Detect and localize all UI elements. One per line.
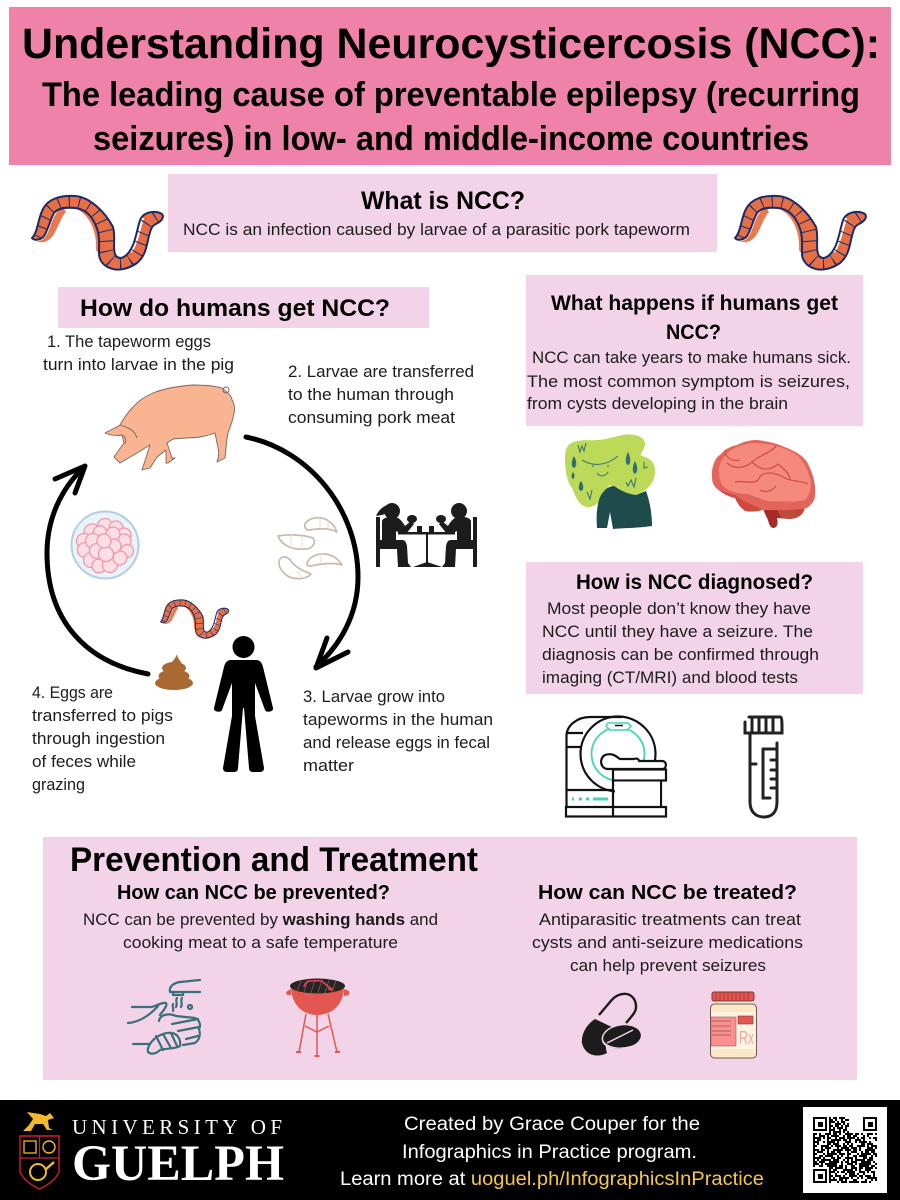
- step 4 text: grazing: [32, 775, 85, 794]
- griffin crest: [23, 1112, 54, 1131]
- symptoms text: NCC can take years to make humans sick.: [532, 348, 851, 367]
- title banner: [9, 7, 891, 165]
- icon: sick person: [565, 434, 655, 529]
- University of Guelph logo: [20, 1112, 284, 1192]
- heading: what happens: What happens if humans get: [551, 292, 838, 315]
- diagnosis text: Most people don’t know they have: [547, 599, 811, 618]
- sub-section: treatment text: can help prevent seizures: [570, 956, 766, 975]
- main title: Understanding Neurocysticercosis (NCC):: [22, 20, 880, 68]
- panel: what is NCC: [168, 174, 717, 252]
- sub-section: prevention text: cooking meat to a safe temperature: [123, 933, 398, 952]
- icon: tapeworm right: [735, 196, 866, 270]
- icon: tapeworm left: [32, 196, 163, 270]
- heading: diagnosed: How is NCC diagnosed?: [576, 571, 813, 594]
- diagnosis text: imaging (CT/MRI) and blood tests: [542, 668, 798, 687]
- icon: larvae: [278, 518, 342, 579]
- subtitle: seizures) in low- and middle-income countries: [93, 120, 809, 158]
- step 1 text: turn into larvae in the pig: [43, 355, 234, 374]
- diagnosis text: NCC until they have a seizure. The: [542, 622, 813, 641]
- step 4 text: through ingestion: [32, 729, 165, 748]
- icon: brain: [712, 440, 815, 528]
- step 4 text: of feces while: [32, 752, 136, 771]
- step 4 text: [32, 683, 173, 794]
- definition text: NCC is an infection caused by larvae of a parasitic pork tapeworm: [183, 220, 690, 239]
- step 2 text: 2. Larvae are transferred: [288, 362, 474, 381]
- step 3 text: matter: [303, 756, 354, 775]
- step 3 text: [303, 687, 493, 775]
- sub-section: prevention text: NCC can be prevented by washing hands and: [83, 910, 438, 929]
- credit text: Created by Grace Couper for the: [404, 1114, 700, 1135]
- symptoms text: from cysts developing in the brain: [527, 394, 788, 413]
- heading: prevention and treatment: Prevention and Treatment: [70, 841, 478, 879]
- icon: prescription bottle: Rx: [739, 1028, 754, 1048]
- icon: blood test tube: [745, 717, 782, 817]
- symptoms text: [527, 348, 851, 413]
- diagnosis text: diagnosis can be confirmed through: [542, 645, 819, 664]
- sub-section: treatment text: cysts and anti-seizure medications: [532, 933, 803, 952]
- sub-section: treatment text: How can NCC be treated?: [538, 882, 797, 904]
- step 4 text: transferred to pigs: [32, 706, 173, 725]
- heading: what is NCC: What is NCC?: [361, 187, 525, 215]
- step 2 text: to the human through: [288, 385, 454, 404]
- sub-section: treatment text: Antiparasitic treatments can treat: [539, 910, 801, 929]
- sub-section: treatment text: [532, 882, 803, 975]
- subtitle: [42, 76, 860, 158]
- step 3 text: and release eggs in fecal: [303, 733, 490, 752]
- diagnosis text: [542, 599, 819, 687]
- panel: how do humans get NCC heading: How do humans get NCC?: [80, 295, 390, 322]
- icon: pig: [105, 385, 235, 470]
- icon: MRI scanner: [566, 716, 666, 817]
- arrow: feces back to pig: [47, 466, 148, 674]
- symptoms text: The most common symptom is seizures,: [527, 372, 850, 391]
- heading: what happens: NCC?: [666, 321, 721, 344]
- step 4 text: 4. Eggs are: [32, 683, 113, 702]
- sub-section: prevention text: [83, 882, 438, 952]
- panel: how is NCC diagnosed: [526, 562, 863, 694]
- panel: prevention and treatment: [43, 837, 857, 1080]
- icon: washing hands: [128, 980, 200, 1054]
- step 2 text: consuming pork meat: [288, 408, 455, 427]
- heading: what happens: [551, 292, 838, 344]
- icon: small tapeworm: [161, 600, 229, 638]
- step 3 text: 3. Larvae grow into: [303, 687, 445, 706]
- step 1 text: 1. The tapeworm eggs: [47, 332, 211, 351]
- icon: feces: [155, 654, 193, 690]
- QR code: [803, 1107, 887, 1193]
- subtitle: The leading cause of preventable epilepsy (recurring: [42, 76, 860, 114]
- credit text: Infographics in Practice program.: [402, 1142, 697, 1163]
- shield: [20, 1136, 59, 1189]
- panel: how do humans get NCC heading: [58, 287, 429, 328]
- icon: people eating at table: [376, 503, 477, 567]
- credit text: Learn more at uoguel.ph/InfographicsInPractice: [340, 1169, 764, 1190]
- credit text: [340, 1114, 764, 1190]
- wordmark: GUELPH: [72, 1136, 284, 1192]
- sub-section: prevention text: How can NCC be prevented?: [117, 882, 390, 904]
- icon: prescription bottle: [710, 992, 756, 1058]
- footer bar: [0, 1100, 900, 1200]
- step 2 text: [288, 362, 474, 427]
- icon: human silhouette: [214, 636, 273, 772]
- icon: barbecue grill: [286, 978, 349, 1056]
- icon: pills: [582, 994, 644, 1056]
- step 1 text: [43, 332, 234, 374]
- arrow: pig to human: [246, 437, 358, 668]
- icon: tapeworm eggs dish: [72, 512, 138, 578]
- wordmark: UNIVERSITY OF: [72, 1115, 282, 1139]
- step 3 text: tapeworms in the human: [303, 710, 493, 729]
- panel: what happens if humans get NCC: [526, 275, 863, 426]
